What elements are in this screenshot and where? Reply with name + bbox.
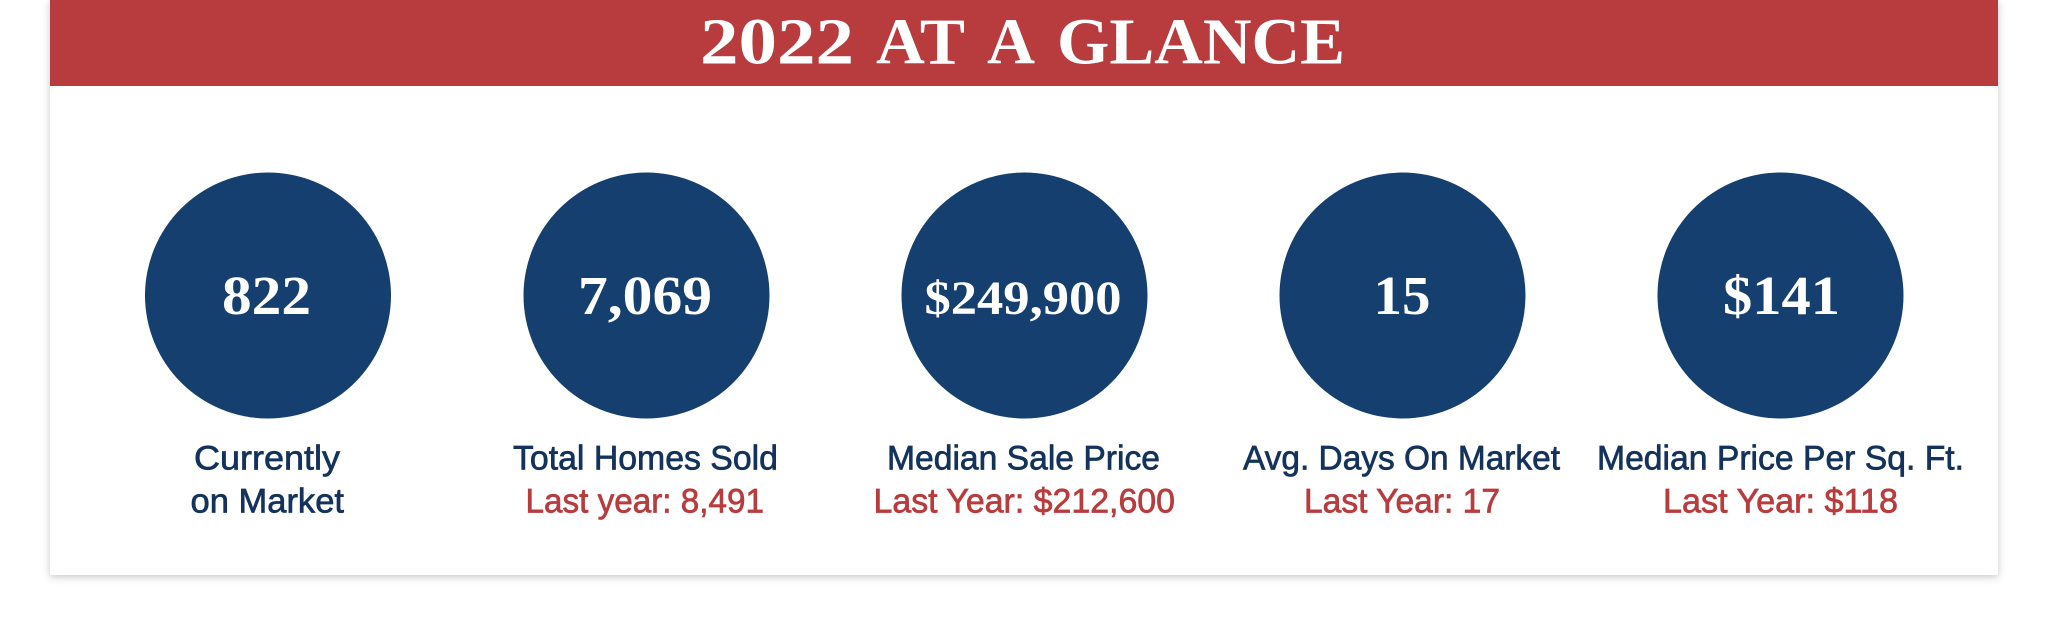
- stat: total homes sold: [513, 172, 778, 520]
- label: currently on market: on Market: [190, 482, 345, 520]
- circle: $141: $141: [1723, 265, 1840, 326]
- label: total homes sold: Last year: 8,491: [526, 482, 764, 520]
- circle: $141: [1658, 172, 1904, 418]
- label: median sale price: Last Year: $212,600: [874, 482, 1175, 520]
- label: total homes sold: [513, 440, 778, 520]
- stat: average days on market: [1243, 172, 1561, 520]
- circle: 15: [1280, 172, 1526, 418]
- stat: median sale price: [874, 172, 1175, 520]
- label: average days on market: [1243, 440, 1561, 520]
- circle: $249,900: [902, 172, 1148, 418]
- label: average days on market: Avg. Days On Market: [1243, 440, 1561, 478]
- title: AT: [876, 6, 965, 78]
- stat: median price per square foot: [1597, 172, 1964, 520]
- label: median sale price: Median Sale Price: [887, 440, 1160, 478]
- label: total homes sold: Total Homes Sold: [513, 440, 778, 478]
- title: GLANCE: [1057, 6, 1345, 78]
- circle: 15: 15: [1374, 265, 1430, 326]
- stat: currently on market: [145, 172, 391, 520]
- label: median price per square foot: Median Price Per Sq. Ft.: [1597, 440, 1964, 478]
- circle: 7,069: 7,069: [578, 265, 712, 326]
- label: currently on market: Currently: [194, 440, 340, 478]
- title: 2022: [700, 6, 854, 78]
- label: currently on market: [190, 440, 345, 520]
- label: median price per square foot: [1597, 440, 1964, 520]
- title: A: [987, 6, 1035, 78]
- label: median sale price: [874, 440, 1175, 520]
- circle: 822: 822: [222, 265, 311, 326]
- circle: 822: [145, 172, 391, 418]
- label: median price per square foot: Last Year: $118: [1663, 482, 1898, 520]
- circle: $249,900: $249,900: [924, 272, 1122, 325]
- circle: 7,069: [524, 172, 770, 418]
- header band: [50, 0, 1998, 86]
- label: average days on market: Last Year: 17: [1304, 482, 1500, 520]
